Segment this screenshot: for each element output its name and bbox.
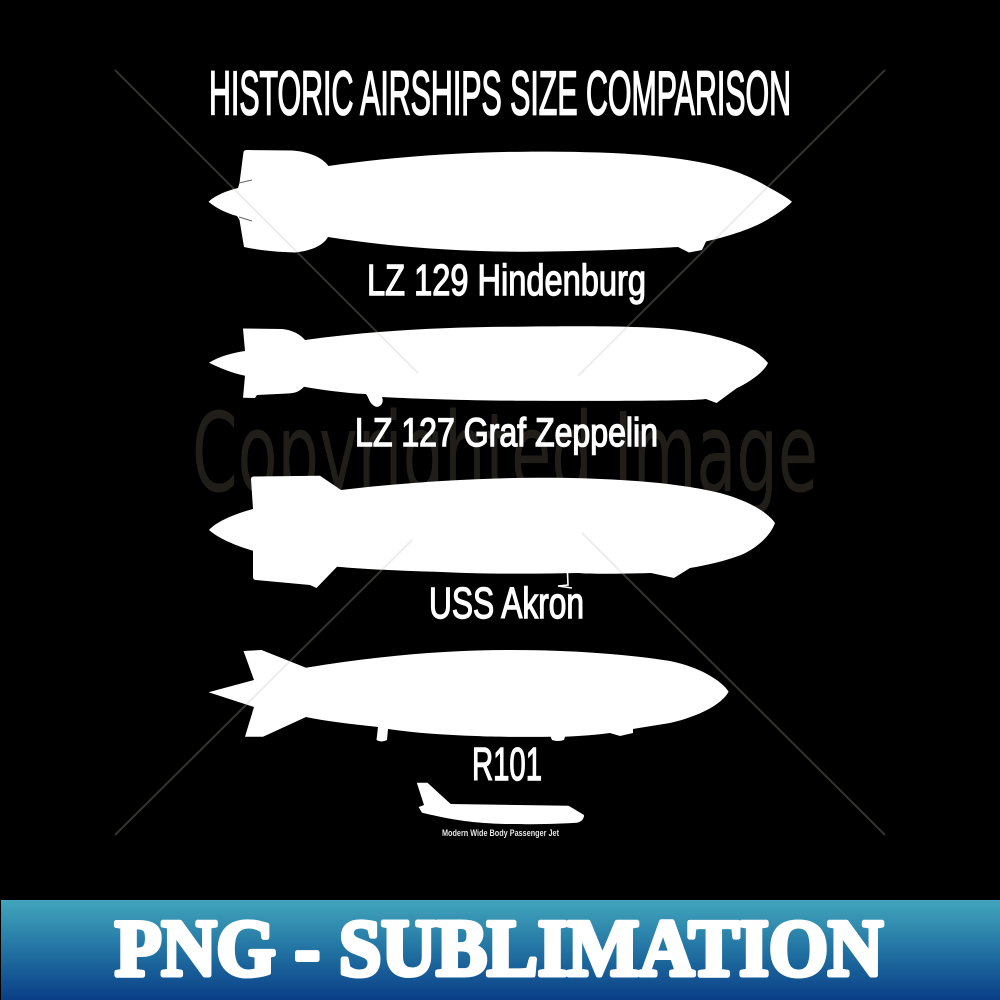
watermark cross overlay [115, 70, 885, 835]
airship: USS Akron [209, 476, 775, 588]
airship: R101 [208, 650, 729, 742]
label: LZ 127 Graf Zeppelin: LZ 127 Graf Zeppelin [355, 411, 658, 455]
airship: LZ 127 Graf Zeppelin [209, 326, 768, 407]
airship: LZ 129 Hindenburg [208, 150, 792, 252]
banner [1, 900, 1000, 1000]
label: modern jet: Modern Wide Body Passenger Jet [442, 828, 560, 839]
label: LZ 129 Hindenburg: LZ 129 Hindenburg [367, 256, 646, 305]
banner text: PNG - SUBLIMATION [115, 905, 883, 993]
watermark cross lines [115, 70, 885, 835]
label: R101: R101 [472, 738, 542, 790]
icon: passenger jet [417, 783, 584, 824]
label: USS Akron: USS Akron [429, 579, 584, 628]
